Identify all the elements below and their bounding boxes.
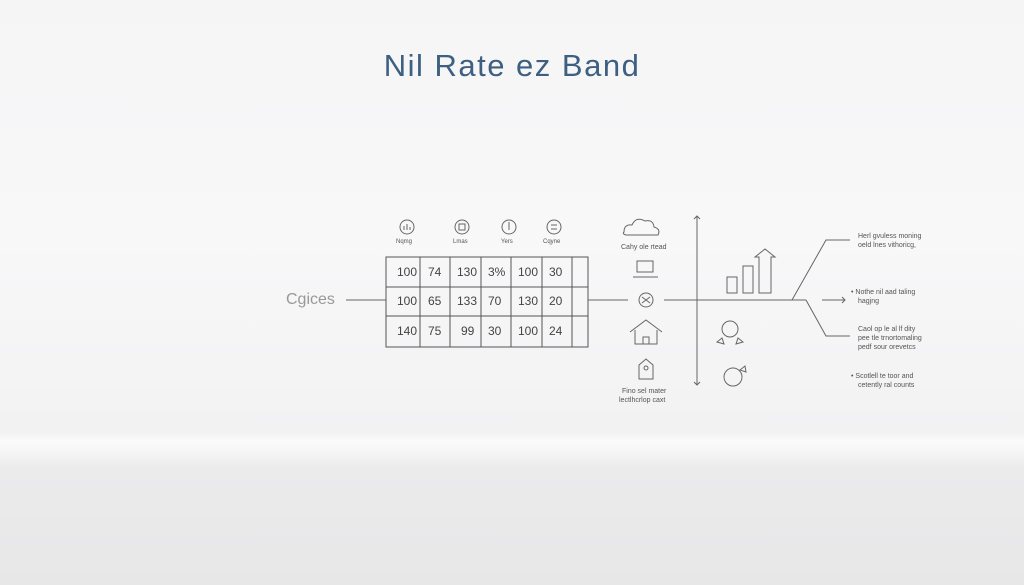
table: 74 xyxy=(428,265,442,279)
title: Nil Rate ez Band xyxy=(384,48,640,83)
table: 70 xyxy=(488,294,502,308)
bar chart xyxy=(727,249,775,293)
column icons: Lmas xyxy=(453,239,468,245)
column icons: Nqmg xyxy=(396,239,412,245)
table: 133 xyxy=(457,294,477,308)
vertical axis arrow xyxy=(694,216,700,385)
column icons: Cqyne xyxy=(543,239,561,245)
callout texts: Caol op le al lf dity xyxy=(858,326,916,333)
icon column xyxy=(619,219,667,404)
table: 130 xyxy=(518,294,538,308)
column icons xyxy=(396,220,561,245)
callout texts: cetently ral counts xyxy=(858,382,915,389)
column icons: Yers xyxy=(501,239,513,245)
lower icons xyxy=(717,321,746,386)
table: 75 xyxy=(428,324,442,338)
table: 100 xyxy=(518,324,538,338)
callout texts: • Nothe nil aad taling xyxy=(851,289,915,296)
table: 30 xyxy=(488,324,502,338)
icon column: Fino sel mater xyxy=(622,388,667,395)
connector left xyxy=(346,299,386,301)
connector middle xyxy=(588,299,806,301)
table: 130 xyxy=(457,265,477,279)
table: 100 xyxy=(397,265,417,279)
table: 24 xyxy=(549,324,563,338)
callout texts: hagjng xyxy=(858,298,879,305)
callout texts: • Scotlell te toor and xyxy=(851,373,913,380)
table: 20 xyxy=(549,294,563,308)
callout lines xyxy=(792,240,850,336)
table: 100 xyxy=(397,294,417,308)
callout texts: pee tle trnortomaling xyxy=(858,335,922,342)
table: 30 xyxy=(549,265,563,279)
table: 100 xyxy=(518,265,538,279)
table: 3% xyxy=(488,265,506,279)
callout texts: Herl gvuless moning xyxy=(858,233,922,240)
callout texts: pedf sour orevetcs xyxy=(858,344,916,351)
callout texts: oeld lnes vithoricg, xyxy=(858,242,916,249)
icon column: lectlhcrlop caxt xyxy=(619,397,665,404)
table: 65 xyxy=(428,294,442,308)
label: Cgices: Cgices xyxy=(286,291,335,308)
table: 140 xyxy=(397,324,417,338)
icon column: Cahy ole rtead xyxy=(621,244,667,251)
callout texts xyxy=(851,233,922,389)
table xyxy=(386,257,588,347)
table: 99 xyxy=(461,324,475,338)
